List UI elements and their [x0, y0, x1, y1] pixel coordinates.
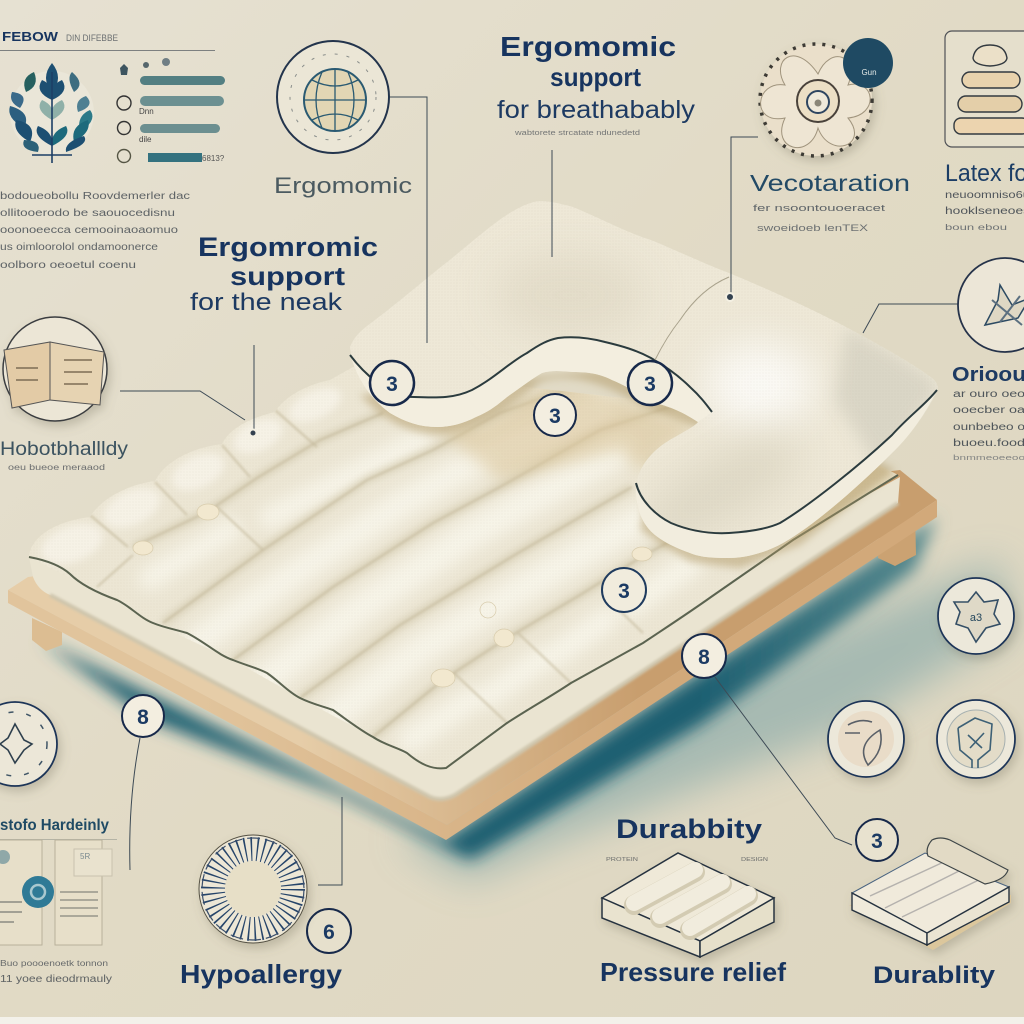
caption: Buo poooenoetk tonnon: [0, 959, 108, 968]
marker 3 lower right: 3: [871, 830, 883, 853]
marker 3 pillow right: 3: [644, 373, 656, 396]
heading: neck support: for the neak: [190, 289, 343, 316]
icon: fibre flower: [199, 835, 307, 943]
legend bar 4: 6813?: [202, 154, 225, 163]
floor shadow under bed: [40, 517, 1010, 880]
heading: neck support: [190, 232, 378, 316]
panel: orthopedic circle: ooecber oa: [953, 405, 1024, 416]
callout lines: [120, 97, 958, 885]
icon: star: [958, 258, 1024, 352]
legend bar 3: dile: [139, 135, 152, 144]
marker 8 frame: [682, 634, 726, 678]
icon: feather badge: [828, 701, 904, 777]
marker 8 left: 8: [137, 706, 149, 729]
icon: open book: [3, 317, 107, 421]
legend subheader: DIN DIFEBBE: [66, 33, 118, 43]
label: durabbity: Durabbity: [616, 814, 762, 844]
mattress top with tufts: [29, 367, 897, 766]
label: ergomomic: Ergomomic: [274, 173, 412, 198]
legend description: ooonoeecca cemooinaoaomuo: [0, 225, 179, 236]
heading: main title: support: [550, 62, 641, 92]
callout anchor dots: [250, 293, 734, 436]
mattress buttons: [133, 504, 652, 687]
label: vecotaration: Vecotaration: [750, 170, 910, 196]
pillow band inner: [352, 337, 712, 427]
panel: orthopedic circle: [952, 258, 1024, 462]
legend bar 2: Dnn: [139, 107, 154, 116]
comparison card right: 5R: [80, 852, 90, 861]
icon: star badge: a3: [970, 612, 982, 624]
icon: mattress block: [602, 853, 774, 957]
panel: latex layers: hooklseneoes: [945, 206, 1024, 217]
panel: orthopedic circle: ar ouro oeo: [953, 389, 1024, 400]
pillow band outer: [636, 390, 937, 558]
panel: book breathability: [0, 317, 129, 472]
marker 3 pillow left: 3: [386, 373, 398, 396]
legend description: us oimloorolol ondamoonerce: [0, 242, 159, 253]
tan shade near pillow: [446, 388, 694, 482]
marker 3 mattress: 3: [618, 580, 630, 603]
mattress: [28, 367, 900, 802]
panel: orthopedic circle: bnmmeoeeoo: [953, 455, 1024, 462]
panel: latex layers: neuoomniso6u: [945, 190, 1024, 201]
panel: orthopedic circle: ounbebeo o: [953, 422, 1024, 433]
panel: latex layers: [945, 31, 1024, 232]
marker 3 pillow left: [370, 361, 414, 405]
label: hobotbhallldy: Hobotbhallldy: [0, 439, 129, 460]
heading: main title: Ergomomic: [500, 31, 676, 62]
panel: pressure relief: [600, 814, 786, 987]
panel: ventilation flower: swoeidoeb lenTEX: [757, 223, 868, 233]
frame top surface: [8, 470, 937, 825]
pillow cast shadow: [360, 370, 895, 568]
icon: star badge: [938, 578, 1014, 654]
marker 6 lower: 6: [323, 921, 335, 944]
icon: blue seal: [22, 876, 54, 908]
marker 8 frame: 8: [698, 646, 710, 669]
heading: main title: wabtorete strcatate ndunedetd: [514, 130, 640, 137]
legend description: oolboro oeoetul coenu: [0, 260, 136, 271]
legend bar 4: [118, 150, 225, 163]
panel: ventilation flower: fer nsoontouoeracet: [753, 203, 886, 213]
panel: pressure relief: PROTEIN: [606, 857, 638, 863]
frame side board: [8, 500, 937, 840]
comparison card left: [0, 840, 42, 945]
panel: hardness comparison: [0, 817, 117, 985]
icon: globe: [277, 41, 389, 153]
marker 3 pillow right: [628, 361, 672, 405]
bed frame: [8, 470, 937, 840]
long tube highlights: [150, 410, 690, 740]
marker 3 center: [534, 394, 576, 436]
heading: neck support: support: [230, 261, 345, 291]
frame leg right: [878, 510, 916, 566]
label: hypoallergy: Hypoallergy: [180, 959, 343, 989]
marker 3 center: 3: [549, 405, 561, 428]
crease shadows wide: [132, 394, 670, 738]
legend header: FEBOW: [2, 29, 59, 44]
icon: mattress with pillow: [849, 838, 1011, 950]
panel: durability: [849, 838, 1011, 989]
heading: neck support: Ergomromic: [198, 232, 378, 262]
mattress piping: [29, 475, 898, 768]
panel: book breathability: oeu bueoe meraaod: [8, 463, 105, 472]
panel: ventilation flower: [750, 38, 910, 233]
icon: dark bubble: Gun: [861, 68, 877, 77]
marker 3 lower right: [856, 819, 898, 861]
legend bar 1: [120, 58, 225, 85]
pillow shading: [352, 202, 938, 532]
heading: main title: for breathabably: [497, 96, 696, 124]
legend bar 2: [117, 96, 224, 116]
pillow seam: [655, 277, 729, 360]
icon: dark bubble: [843, 38, 893, 88]
marker 8 left: [122, 695, 164, 737]
panel: globe icon with label: [274, 41, 412, 198]
icon: compass badge: [0, 702, 57, 786]
icon: stacked layers: [945, 31, 1024, 147]
marker 3 mattress: [602, 568, 646, 612]
mattress texture: [30, 370, 896, 766]
label: stofo hardeinly: stofo Hardeinly: [0, 817, 109, 834]
label: pressure relief: Pressure relief: [600, 957, 786, 987]
mattress side band: [29, 477, 900, 799]
comparison card right: [55, 840, 112, 945]
pillow body: [350, 201, 938, 558]
label: orioo: Orioou: [952, 364, 1024, 386]
bottom page strip: [0, 1017, 1024, 1024]
neck pillow: [340, 190, 950, 570]
legend description: [0, 191, 190, 271]
panel: materials legend: [0, 29, 225, 271]
panel: orthopedic circle: buoeu.food: [953, 438, 1024, 449]
panel: pressure relief: DESIGN: [741, 857, 768, 863]
icon: flower: [760, 44, 872, 156]
pillow piping inner: [350, 337, 712, 412]
label: durablity: Durablity: [873, 962, 996, 989]
panel: latex layers: boun ebou: [945, 223, 1007, 232]
pillow piping outer: [636, 390, 937, 533]
frame leg left: [32, 618, 62, 651]
tuft highlights: [42, 388, 340, 564]
number markers: [122, 361, 898, 953]
icon: tree badge: [937, 700, 1015, 778]
heading: main title: [497, 31, 696, 137]
legend bar 3: [118, 122, 220, 144]
legend description: ollitooerodo be saouocedisnu: [0, 208, 175, 219]
panel: hypoallergy: [180, 835, 343, 989]
marker 6 lower: [307, 909, 351, 953]
legend description: bodoueobollu Roovdemerler dac: [0, 191, 190, 202]
icon: laurel leaf: [9, 63, 94, 163]
crease lines: [90, 399, 667, 737]
panel: hardness comparison: 11 yoee dieodrmauly: [0, 974, 112, 985]
